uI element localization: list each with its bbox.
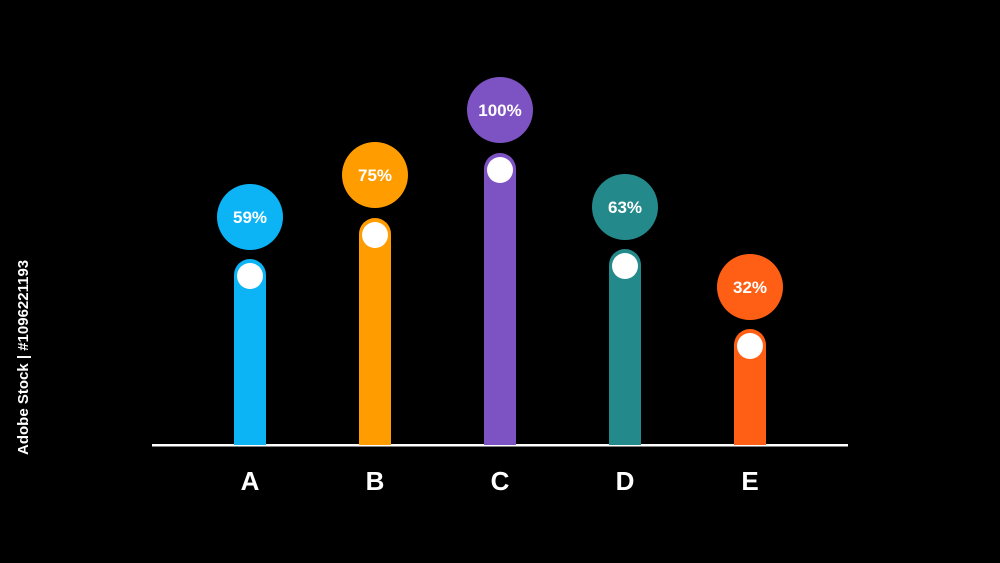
baseline axis: [152, 444, 848, 446]
bar D: [592, 174, 658, 496]
bar A: [217, 184, 283, 496]
bar E: E: [741, 466, 759, 496]
bar A: A: [241, 466, 260, 496]
watermark id: Adobe Stock | #1096221193: [15, 260, 32, 455]
bar D: 63%: [608, 198, 642, 217]
bar E: 32%: [733, 278, 767, 297]
bar B: [342, 142, 408, 496]
bar B: B: [366, 466, 384, 496]
bar D: D: [616, 466, 634, 496]
bar E: [717, 254, 783, 496]
bar A: 59%: [233, 208, 267, 227]
bar C: 100%: [478, 101, 522, 120]
bar B: 75%: [358, 166, 392, 185]
bar C: C: [491, 466, 510, 496]
bar C: [467, 77, 533, 496]
